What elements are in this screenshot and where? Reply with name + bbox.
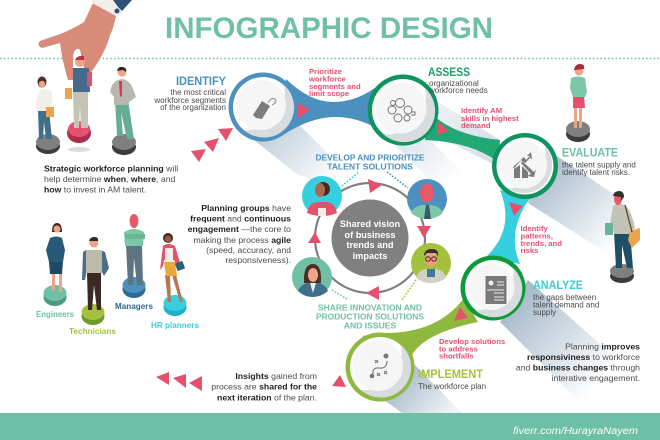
pedestal label: engineers: Engineers	[36, 310, 75, 319]
pedestal label: technicians: Technicians	[69, 327, 117, 336]
text: planning improves	[516, 342, 640, 383]
icon: game plan	[370, 354, 388, 378]
label: evaluate	[562, 146, 636, 177]
text: planning groups: (speed, accuracy, and	[206, 245, 291, 255]
dotted leaders	[332, 172, 416, 300]
label: analyze: ANALYZE	[533, 278, 583, 292]
text: planning improves: interative engagement.	[552, 373, 640, 383]
text: insights: Insights gained from	[235, 371, 317, 381]
text: planning improves: responsiviness to workforce	[527, 352, 640, 362]
text: strategic workforce planning: help determine when, where, and	[44, 174, 176, 184]
label: implement: The workforce plan	[418, 382, 486, 391]
center: shared vision: impacts	[353, 251, 387, 261]
text: insights	[211, 371, 317, 402]
label: identify: workforce segments	[153, 96, 226, 105]
node: analyze	[460, 256, 526, 320]
person: HR planner	[160, 233, 186, 316]
label: assess	[428, 65, 488, 95]
dotted title rule	[0, 58, 660, 60]
node: identify	[228, 72, 298, 142]
callout: identify patterns: patterns,	[520, 232, 553, 240]
footer credit: fiverr.com/HurayraNayem	[513, 426, 638, 437]
label: analyze: supply	[533, 308, 556, 317]
heading: share innovation: AND ISSUES	[344, 320, 397, 330]
callout: identify AM: Identify AM	[461, 106, 502, 115]
label: identify: the most critical	[170, 88, 226, 97]
heading: develop and prioritize: DEVELOP AND PRIORITIZE	[316, 152, 425, 162]
label: evaluate: identify talent risks.	[562, 168, 630, 177]
heading: develop and prioritize: TALENT SOLUTIONS	[327, 162, 413, 172]
text: planning improves: and business changes through	[516, 362, 640, 372]
callout: identify AM: skills in highest	[461, 114, 519, 123]
person: technician	[82, 237, 109, 325]
heading: share innovation: SHARE INNOVATION AND	[318, 302, 422, 312]
label: evaluate: EVALUATE	[562, 146, 618, 160]
label: assess: organizational	[429, 79, 479, 88]
avatar: blue man	[407, 179, 447, 219]
heading: share innovation: PRODUCTION SOLUTIONS	[316, 312, 424, 322]
person: woman evaluate	[566, 64, 590, 142]
icon: price tag	[253, 98, 276, 119]
avatar: teal woman	[292, 257, 332, 297]
callout: prioritize: segments and	[309, 82, 361, 91]
connector triangles	[298, 103, 523, 387]
text: insights: next iteration of the plan.	[217, 392, 317, 402]
icon: checklist document	[486, 276, 506, 304]
text: planning groups: responsiveness).	[225, 255, 291, 265]
person: manager	[122, 214, 146, 298]
callout: identify AM: demand	[461, 121, 491, 130]
hand	[38, 0, 132, 80]
label: identify: IDENTIFY	[176, 74, 226, 88]
arrows: bottom left triple	[156, 372, 202, 391]
person: lifted man on pink pedestal	[65, 56, 92, 152]
center: shared vision: trends and	[347, 240, 393, 250]
node: implement	[346, 332, 414, 402]
pedestal label: managers: Managers	[115, 302, 154, 311]
label: identify	[153, 74, 226, 112]
avatar: cyan woman	[302, 176, 342, 216]
callout: identify patterns	[520, 224, 562, 255]
label: analyze: the gaps between	[533, 293, 596, 302]
title: INFOGRAPHIC DESIGN	[165, 12, 493, 45]
icon: trend chart	[513, 152, 536, 178]
text: planning groups: making the process agile	[193, 235, 291, 245]
person: woman on grey pedestal	[36, 76, 60, 154]
person: man with bag	[605, 191, 640, 283]
center: shared vision: Shared vision	[340, 219, 401, 229]
heading: develop and prioritize	[316, 152, 425, 172]
text: planning groups	[188, 203, 291, 265]
node: assess	[368, 74, 438, 146]
callout: identify patterns: Identify	[520, 224, 549, 233]
connector: identify to assess	[280, 79, 388, 137]
text: planning improves: Planning improves	[565, 342, 640, 352]
arrows: top left triple	[191, 128, 233, 162]
ring arrows	[308, 179, 431, 300]
callout: develop solutions: to address	[439, 344, 478, 354]
callout: prioritize: Prioritize	[309, 67, 343, 76]
text: planning groups: frequent and continuous	[190, 214, 291, 224]
center: shared vision	[332, 200, 408, 276]
heading: share innovation	[316, 302, 424, 330]
ring around shared vision	[315, 183, 425, 293]
text: insights: process are shared for the	[211, 382, 317, 392]
long shadows	[244, 100, 618, 413]
callout: identify patterns: trends, and	[520, 239, 562, 248]
person: man on grey pedestal	[110, 67, 136, 155]
text: planning groups: Planning groups have	[201, 203, 291, 213]
person: engineer	[44, 223, 66, 306]
connector: evaluate to analyze	[485, 190, 530, 264]
text: strategic workforce planning: how to invest in AM talent.	[44, 184, 146, 194]
footer band	[0, 413, 660, 440]
icon: group of heads	[388, 98, 415, 122]
node: evaluate	[492, 133, 558, 199]
text: strategic workforce planning	[44, 164, 178, 194]
label: analyze: talent demand and	[533, 300, 599, 310]
center: shared vision: of business	[344, 230, 396, 240]
label: analyze	[533, 278, 599, 317]
avatar: lime man	[411, 243, 451, 283]
callout: develop solutions: shortfalls	[439, 352, 474, 360]
callout: develop solutions	[439, 337, 505, 360]
label: evaluate: the talent supply and	[562, 160, 636, 170]
label: assess: workforce needs	[428, 86, 488, 95]
callout: develop solutions: Develop solutions	[439, 337, 505, 346]
callout: prioritize: limit scope	[309, 89, 350, 98]
connector: analyze to implement	[362, 298, 478, 365]
callout: prioritize	[308, 67, 361, 98]
label: identify: of the organization	[160, 103, 226, 112]
pedestal label: HR planners: HR planners	[151, 321, 200, 330]
text: strategic workforce planning: Strategic workforce planning will	[44, 164, 178, 174]
text: planning groups: engagement —the core to	[188, 224, 291, 234]
label: assess: ASSESS	[428, 65, 470, 79]
callout: identify AM	[461, 106, 519, 130]
callout: identify patterns: risks	[520, 246, 538, 255]
callout: prioritize: workforce	[308, 74, 346, 84]
connector: assess to evaluate	[425, 110, 500, 162]
label: implement: IMPLEMENT	[418, 367, 484, 381]
label: implement	[418, 367, 486, 391]
